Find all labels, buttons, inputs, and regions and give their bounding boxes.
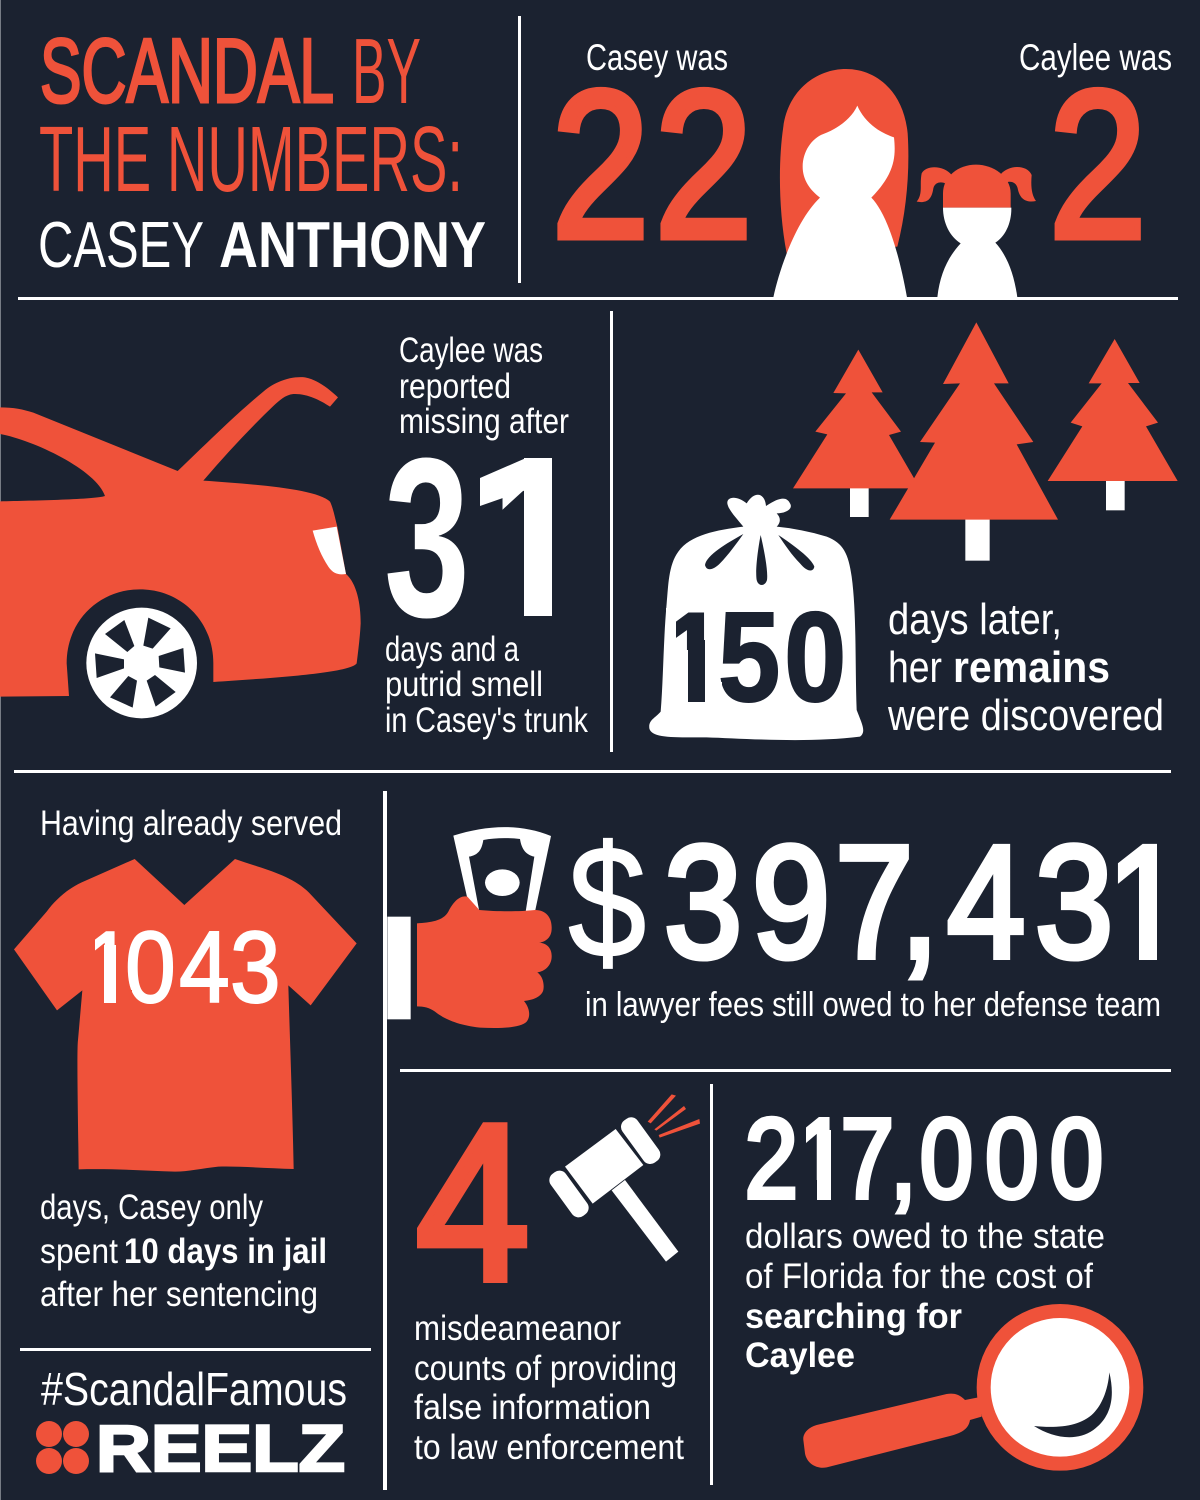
text: misdemeanor caption: misdeameanor	[414, 1309, 621, 1348]
text: days later her remains were discovered	[887, 595, 1164, 740]
text: misdemeanor caption: counts of providing	[414, 1349, 677, 1388]
text: days, Casey only spent 10 days in jail: 10 days in jail	[124, 1232, 327, 1271]
text: misdemeanor caption: false information	[414, 1388, 651, 1427]
text: search cost caption: searching for	[745, 1297, 962, 1336]
text: reported missing after: Caylee was	[399, 331, 543, 370]
text: days, Casey only spent 10 days in jail: days, Casey only	[40, 1188, 263, 1227]
title: BY	[352, 19, 421, 123]
text: misdemeanor caption	[414, 1309, 684, 1467]
text: days later her remains were discovered: remains	[953, 643, 1110, 692]
text: days, Casey only spent 10 days in jail: spent	[40, 1232, 118, 1271]
text: days, Casey only spent 10 days in jail	[40, 1188, 327, 1314]
text: having already served: Having already served	[40, 804, 342, 843]
icon: three trees	[793, 322, 1178, 561]
title: THE NUMBERS:	[39, 107, 463, 211]
number: 2: 2	[1049, 47, 1147, 282]
panel: misdemeanor counts	[414, 1079, 700, 1467]
text: search cost caption: of Florida for the cost of	[745, 1257, 1093, 1296]
number: 4: 4	[416, 1079, 530, 1327]
text: days and a putrid smell: in Casey's trunk	[385, 701, 588, 740]
icon: prison shirt with 1043: 1043	[83, 912, 281, 1024]
title: SCANDAL	[40, 21, 334, 122]
panel: lawyer fees	[387, 813, 1191, 1028]
text: days, Casey only spent 10 days in jail: after her sentencing	[40, 1275, 318, 1314]
panel: ages	[551, 37, 1172, 297]
label: Casey was: Casey was	[586, 37, 728, 78]
text: reported missing after: reported	[399, 367, 511, 406]
icon: woman and child	[773, 69, 1036, 297]
text: reported missing after: missing after	[399, 402, 569, 441]
icon: prison shirt with 1043	[14, 859, 357, 1172]
text: days and a putrid smell: days and a	[385, 630, 519, 669]
icon: hand holding money	[387, 827, 552, 1028]
text: misdemeanor caption: to law enforcement	[414, 1428, 684, 1467]
text: search cost caption: Caylee	[745, 1336, 855, 1375]
panel: remains discovered	[649, 322, 1178, 740]
logo: REELZ: REELZ	[96, 1411, 345, 1485]
panel: car and 31 days	[0, 331, 588, 740]
number: 217,000: 217,000	[745, 1096, 1103, 1222]
number: 31: 31	[384, 411, 578, 665]
title	[38, 19, 486, 281]
hashtag: #ScandalFamous	[41, 1363, 347, 1415]
text: days later her remains were discovered: were discovered	[887, 691, 1164, 740]
title: CASEY	[38, 208, 204, 281]
panel: search cost	[745, 1096, 1136, 1468]
text: search cost caption: dollars owed to the state	[745, 1217, 1105, 1256]
text: search cost caption	[745, 1217, 1105, 1375]
icon: gavel	[546, 1094, 700, 1262]
text: days and a putrid smell	[385, 630, 588, 740]
icon: garbage bag with 150: 150	[662, 587, 846, 729]
text: days later her remains were discovered: days later,	[888, 595, 1062, 644]
number: 22: 22	[551, 47, 753, 282]
title: ANTHONY	[219, 208, 486, 281]
text: days and a putrid smell: putrid smell	[385, 665, 543, 704]
text: reported missing after	[399, 331, 569, 441]
icon: car with open trunk	[0, 377, 361, 718]
number: lawyer fees: $397,431	[568, 813, 1185, 991]
icon: garbage bag with 150	[649, 495, 863, 740]
panel: jail	[14, 804, 357, 1485]
text: days later her remains were discovered: her	[888, 643, 942, 692]
icon: magnifying glass	[803, 1311, 1136, 1468]
